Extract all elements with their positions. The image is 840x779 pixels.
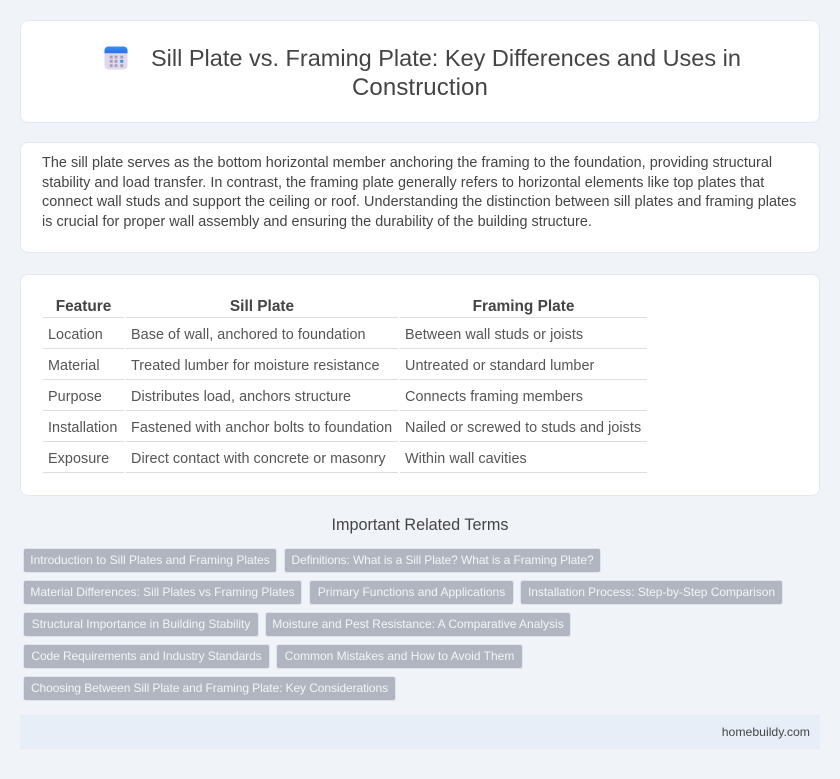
footer site name: homebuildy.com — [722, 725, 810, 739]
chip: Code Requirements and Industry Standards — [31, 649, 262, 663]
title: Sill Plate vs. Framing Plate: Key Differences and Uses in — [151, 45, 741, 71]
chip: Material Differences: Sill Plates vs Framing Plates — [30, 585, 295, 599]
comparison table: Material — [48, 358, 100, 374]
comparison table: Exposure — [48, 451, 109, 467]
intro paragraph: connect wall studs and support the ceiling or roof. Understanding the distinction between sill plates and framing plates — [42, 194, 796, 210]
footer — [20, 715, 820, 749]
chip: Moisture and Pest Resistance: A Comparative Analysis — [272, 617, 564, 631]
chip — [276, 644, 523, 669]
title — [151, 45, 741, 101]
chip: Introduction to Sill Plates and Framing Plates — [30, 553, 270, 567]
comparison table: Feature — [56, 298, 111, 315]
chip: Structural Importance in Building Stability — [32, 617, 250, 631]
comparison table: Installation — [48, 420, 117, 436]
chip — [284, 548, 601, 573]
chip — [23, 548, 277, 573]
panel: header — [20, 20, 820, 123]
chip: Choosing Between Sill Plate and Framing Plate: Key Considerations — [31, 681, 388, 695]
heading: related terms: Important Related Terms — [332, 516, 508, 534]
chip — [23, 644, 270, 669]
intro paragraph: The sill plate serves as the bottom horizontal member anchoring the framing to the foundation, providing structural — [42, 155, 772, 171]
comparison table: Untreated or standard lumber — [405, 358, 594, 374]
comparison table: Nailed or screwed to studs and joists — [405, 420, 641, 436]
chip: Installation Process: Step-by-Step Comparison — [528, 585, 775, 599]
chip: Common Mistakes and How to Avoid Them — [285, 649, 514, 663]
chip — [23, 676, 396, 701]
comparison table: Distributes load, anchors structure — [131, 389, 351, 405]
comparison table: Connects framing members — [405, 389, 583, 405]
chip — [265, 612, 571, 637]
panel: introduction text — [20, 142, 820, 253]
chip — [23, 580, 302, 605]
comparison table: Direct contact with concrete or masonry — [131, 451, 386, 467]
title: Construction — [352, 74, 488, 101]
comparison table: Sill Plate — [230, 298, 294, 315]
comparison table: Purpose — [48, 389, 102, 405]
comparison table: Within wall cavities — [405, 451, 527, 467]
comparison table — [43, 298, 647, 473]
comparison table: Base of wall, anchored to foundation — [131, 327, 366, 343]
chip — [23, 612, 259, 637]
chip — [520, 580, 783, 605]
intro paragraph — [42, 155, 796, 230]
comparison table: Between wall studs or joists — [405, 327, 583, 343]
chip: Definitions: What is a Sill Plate? What is a Framing Plate? — [291, 553, 594, 567]
comparison table: Location — [48, 327, 103, 343]
comparison table: Fastened with anchor bolts to foundation — [131, 420, 392, 436]
intro paragraph: stability and load transfer. In contrast, the framing plate generally refers to horizontal elements like top plates that — [42, 175, 764, 191]
comparison table: Framing Plate — [473, 298, 574, 315]
chip: Primary Functions and Applications — [318, 585, 505, 599]
icon: calendar — [104, 46, 128, 70]
intro paragraph: is crucial for proper wall assembly and ensuring the durability of the building structure. — [42, 214, 592, 230]
related terms chips — [23, 548, 783, 701]
comparison table: Treated lumber for moisture resistance — [131, 358, 380, 374]
panel: comparison table — [20, 274, 820, 496]
chip — [309, 580, 514, 605]
